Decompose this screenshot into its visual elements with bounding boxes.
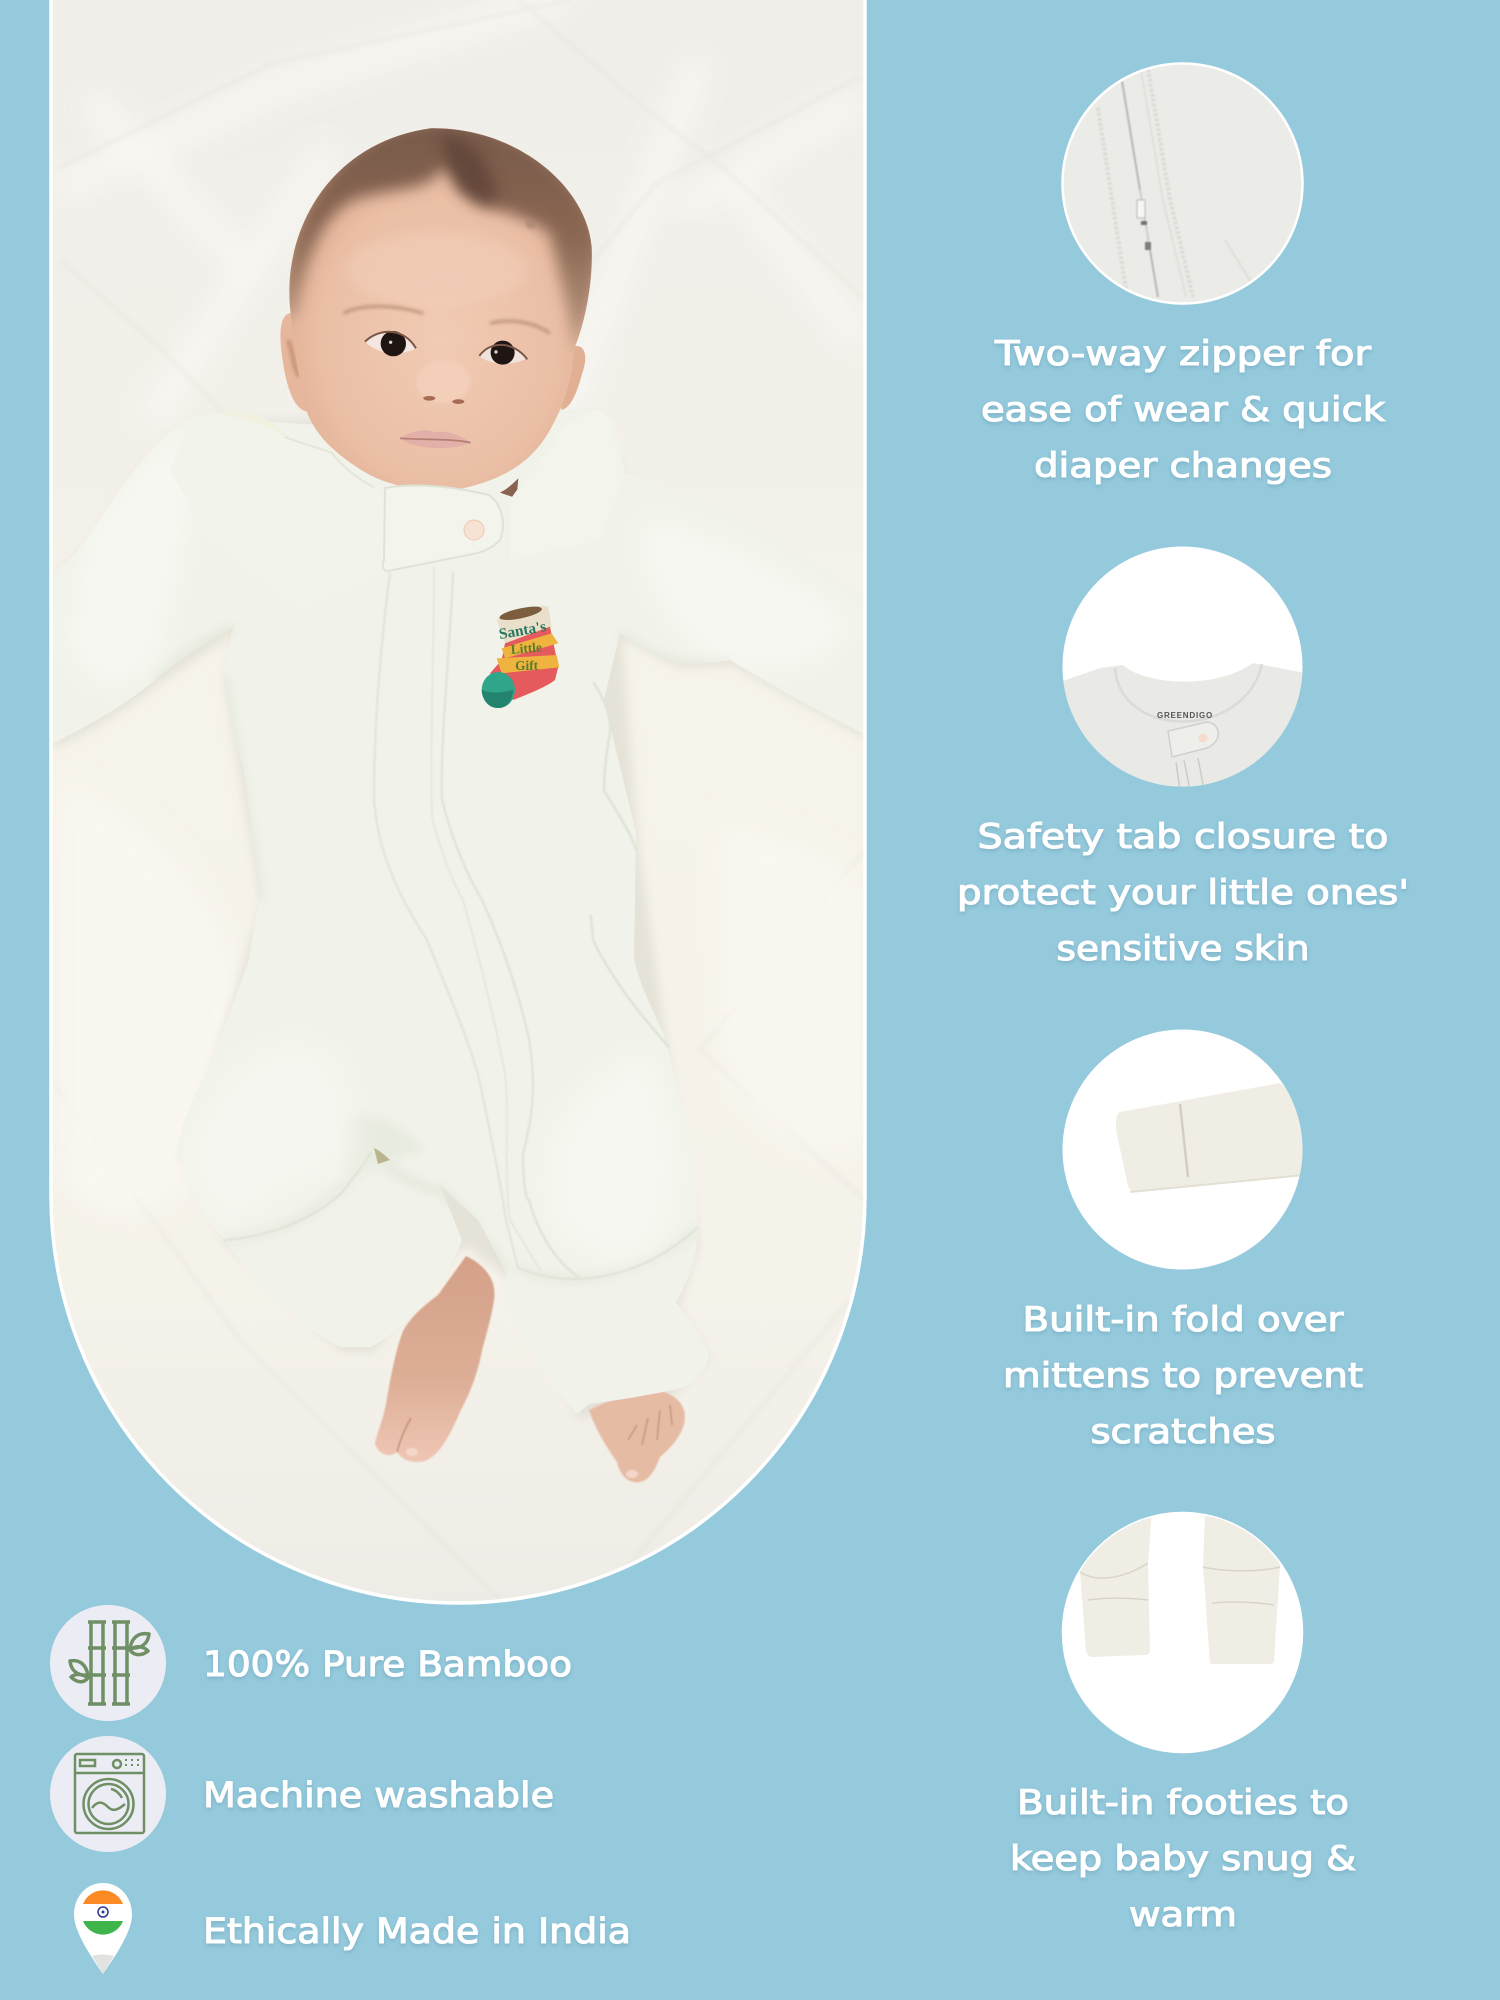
romper body xyxy=(40,390,880,1450)
label: Ethically Made in India xyxy=(203,1912,631,1952)
label: 100% Pure Bamboo xyxy=(203,1645,572,1685)
caption: Two-way zipper for xyxy=(994,334,1371,374)
caption: mittens to prevent xyxy=(1003,1356,1363,1396)
nose xyxy=(417,360,470,404)
foot: right xyxy=(406,1388,685,1482)
caption: keep baby snug & xyxy=(1010,1839,1356,1879)
romper shadow xyxy=(52,415,868,1419)
ears xyxy=(280,313,585,412)
brows xyxy=(343,306,550,333)
collar and tab xyxy=(206,415,518,572)
detail image: footies xyxy=(1062,1500,1302,1752)
cheeks glow xyxy=(352,243,520,286)
eye left xyxy=(365,331,417,356)
caption: sensitive skin xyxy=(1056,929,1310,969)
icon: India flag pin xyxy=(74,1883,132,1974)
arch border xyxy=(51,0,865,1603)
detail image: safety tab: GREENDIGO xyxy=(1157,711,1213,720)
caption: Safety tab closure to xyxy=(978,817,1388,857)
caption: Built-in fold over xyxy=(1022,1300,1344,1340)
caption xyxy=(1010,1783,1356,1935)
baby xyxy=(40,390,880,1482)
feature 2: safety tab xyxy=(957,546,1409,969)
caption: protect your little ones' xyxy=(957,873,1409,913)
quilted bedding xyxy=(40,0,880,1615)
foot: left xyxy=(375,1256,494,1462)
icon: bamboo xyxy=(50,1605,166,1721)
logo: Santa's Little Gift sock: Gift xyxy=(515,658,539,673)
caption: Built-in footies to xyxy=(1017,1783,1349,1823)
detail image: mitten xyxy=(1062,1030,1304,1270)
logo: Santa's Little Gift sock: Santa's xyxy=(498,618,548,643)
inner collar left xyxy=(216,412,286,436)
feature 1: two-way zipper xyxy=(981,64,1385,486)
badge: machine washable xyxy=(50,1736,554,1852)
caption xyxy=(957,817,1409,969)
mouth xyxy=(400,430,471,448)
label: Machine washable xyxy=(203,1776,554,1816)
icon: washing machine xyxy=(50,1736,166,1852)
caption: warm xyxy=(1129,1895,1237,1935)
eye right xyxy=(479,341,527,365)
logo: Santa's Little Gift sock xyxy=(482,604,559,708)
badge: bamboo xyxy=(50,1605,572,1721)
caption: diaper changes xyxy=(1034,446,1332,486)
caption: scratches xyxy=(1090,1412,1276,1452)
feature 4: built-in footies xyxy=(1010,1500,1356,1935)
detail image: safety tab xyxy=(1060,546,1310,800)
panel: baby photo in arch frame xyxy=(40,0,880,1615)
head xyxy=(280,120,600,498)
feature 3: fold over mittens xyxy=(1003,1030,1363,1452)
caption xyxy=(981,334,1385,486)
face xyxy=(289,128,592,490)
hair xyxy=(289,128,592,348)
badge: made in India xyxy=(74,1883,631,1974)
zipper placket xyxy=(224,566,698,1280)
logo: Santa's Little Gift sock: Little xyxy=(510,639,542,657)
detail image: zipper xyxy=(1062,64,1302,304)
caption xyxy=(1003,1300,1363,1452)
caption: ease of wear & quick xyxy=(981,390,1385,430)
